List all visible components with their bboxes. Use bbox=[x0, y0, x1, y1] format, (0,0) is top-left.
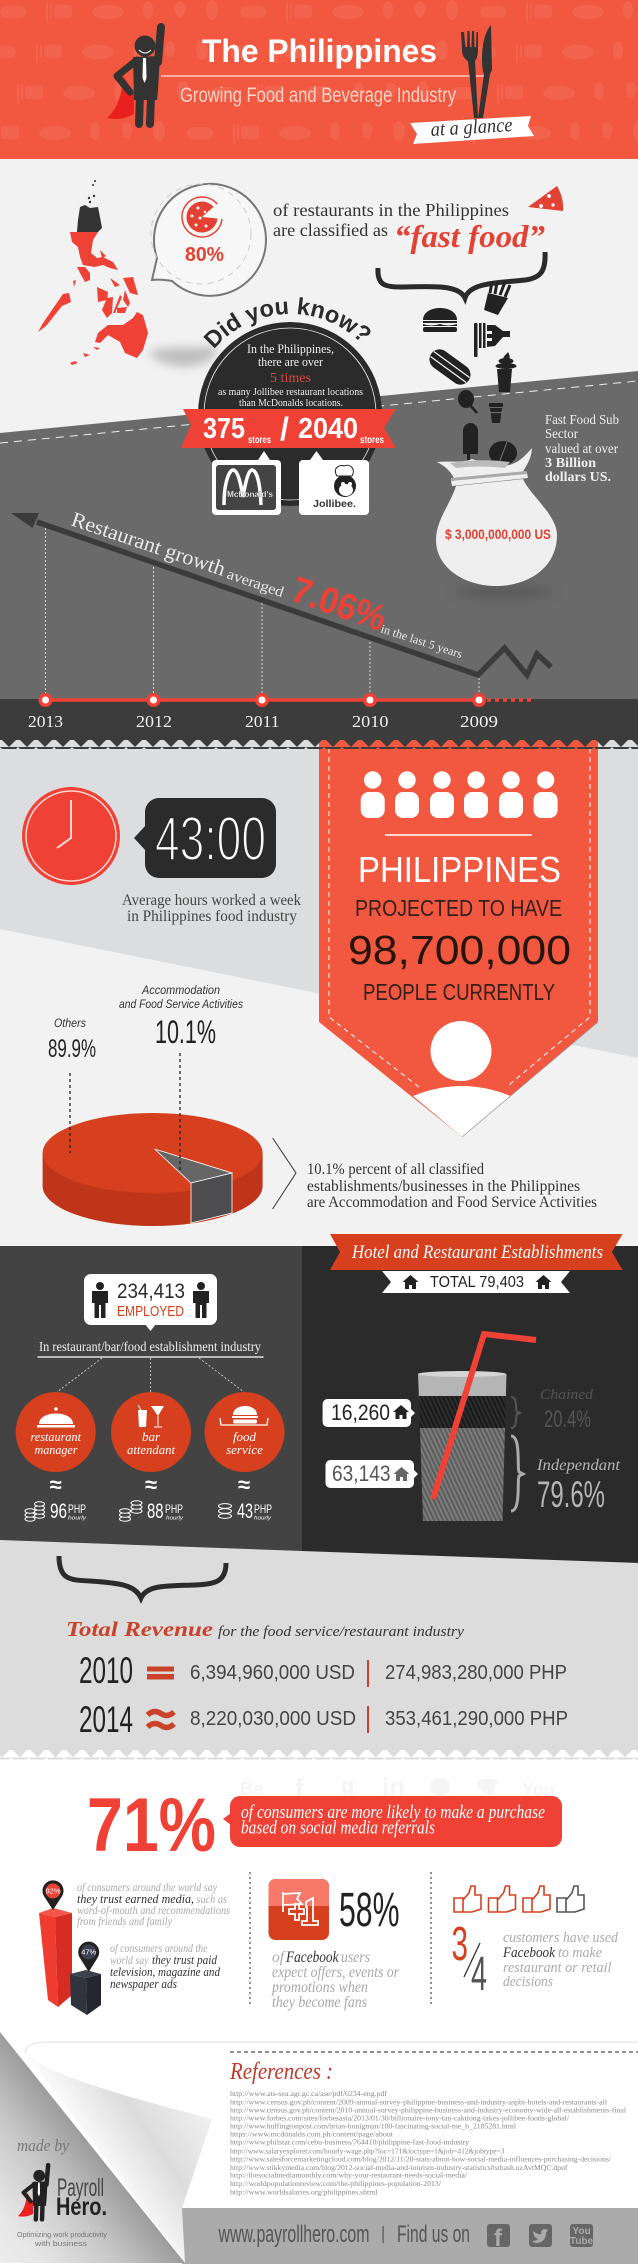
text: website: Find us on bbox=[397, 2221, 470, 2248]
icon: facebook: f bbox=[494, 2225, 503, 2252]
tagline: Optimizing work productivity bbox=[17, 2230, 107, 2239]
text: facebook offers: promotions when bbox=[271, 1979, 368, 1996]
icon: fork bbox=[474, 323, 510, 357]
text: fast food sub sector bbox=[545, 412, 619, 484]
labels: chained bbox=[540, 1387, 594, 1433]
icon: ice cream bbox=[496, 352, 516, 392]
timeline band bbox=[0, 693, 638, 740]
panel: employment bbox=[0, 1246, 302, 1551]
list: reference urls: http://www.philstar.com/cebu-business/764410/philippine-fast-food-industry bbox=[230, 2138, 469, 2147]
list: reference urls bbox=[230, 2089, 626, 2196]
text: earned media bbox=[77, 1882, 230, 1928]
icons: faint social row bbox=[240, 1772, 555, 1803]
list: reference urls: http://www.census.gov.ph/content/2009-annual-survey-philippine-business-and-industry-aspbi-hotels-and-restaurants-all bbox=[230, 2097, 607, 2106]
row: 2014 bbox=[79, 1699, 568, 1740]
list: reference urls: http://www.huffingtonpost.com/brian-honigman/100-fascinating-social-me_b_2185281.html bbox=[230, 2122, 516, 2130]
text: restaurant growth label: averaged bbox=[225, 567, 286, 601]
text: employment subhead: In restaurant/bar/food establishment industry bbox=[39, 1340, 261, 1355]
chart: earned vs paid media bars bbox=[39, 1880, 101, 2015]
text: paid media: world say bbox=[110, 1955, 149, 1967]
role: restaurant manager: ≈ bbox=[50, 1472, 62, 1497]
title: The Philippines bbox=[202, 33, 437, 69]
role: bar attendant: PHP bbox=[165, 1502, 183, 1516]
labels: independent bbox=[536, 1457, 621, 1515]
digital display: 43:00: 43:00 bbox=[155, 805, 266, 874]
text: facebook offers: expect offers, events or bbox=[272, 1964, 400, 1981]
credit: made by Payroll Hero: made by bbox=[17, 2136, 69, 2155]
text: average hours: in Philippines food industry bbox=[127, 908, 297, 925]
text: facebook offers: of bbox=[272, 1949, 287, 1966]
list: reference urls: https://www.mcdonalds.com.ph/content/page/about bbox=[230, 2130, 394, 2139]
text: fast food sub sector: valued at over bbox=[545, 441, 618, 456]
icon: fries bbox=[484, 282, 510, 315]
ribbon: store counts bbox=[181, 409, 396, 448]
list: reference urls: http://www.worldsalaries.org/philippines.shtml bbox=[230, 2187, 378, 2196]
icons: falling food bbox=[423, 282, 517, 465]
list: reference urls: http://www.forbes.com/sites/forbesasia/2013/01/30/billionaire-tony-tan-caktiong-takes-jollibee-foods-global/ bbox=[230, 2114, 570, 2122]
icons: faint social row: You bbox=[522, 1780, 555, 1800]
list: reference urls: http://thesocialmediamonthly.com/why-your-restaurant-needs-social-media/ bbox=[230, 2171, 468, 2180]
panel: revenue background bbox=[0, 1540, 638, 1750]
role: bar attendant: hourly bbox=[166, 1516, 184, 1522]
panel: hotel and restaurant establishments bbox=[302, 1234, 638, 1563]
text: earned media: of consumers around the world say bbox=[77, 1882, 218, 1894]
text: customers facebook: decisions bbox=[503, 1974, 553, 1990]
role: bar attendant bbox=[111, 1392, 191, 1523]
label: bag amount: $ 3,000,000,000 US bbox=[445, 526, 551, 542]
ribbon: hotel heading: Hotel and Restaurant Establishments bbox=[351, 1242, 603, 1263]
text: fast food sub sector: dollars US. bbox=[545, 469, 611, 484]
icon: youtube: You bbox=[572, 2226, 591, 2237]
panel: work and population background bbox=[0, 740, 638, 1246]
icon: pizza slice bbox=[528, 186, 563, 211]
text: customers facebook bbox=[502, 1930, 618, 1990]
role: bar attendant: attendant bbox=[127, 1442, 175, 1457]
icon: person head bbox=[430, 1021, 492, 1081]
role: bar attendant: ≈ bbox=[145, 1472, 157, 1497]
icon: youtube bbox=[570, 2224, 594, 2247]
text: restaurants classified bbox=[273, 200, 545, 254]
icon: pizza bbox=[182, 197, 222, 237]
footer outline bbox=[25, 2042, 638, 2053]
text: facebook offers: Facebook bbox=[285, 1949, 339, 1966]
text: pie explanation bbox=[307, 1161, 597, 1211]
role: food service: food bbox=[233, 1429, 257, 1444]
text: pie explanation: 10.1% percent of all classified bbox=[307, 1161, 484, 1178]
ribbon: store counts: 2040 bbox=[298, 413, 358, 445]
heading: total revenue: Total Revenue bbox=[66, 1617, 213, 1641]
text: earned media: word-of-mouth and recommendations bbox=[77, 1905, 230, 1917]
list: reference urls: http://www.census.gov.ph/content/2010-annual-survey-philippine-business-and-industry-economy-wide-all-establishments-final bbox=[230, 2105, 626, 2114]
role: food service: service bbox=[226, 1442, 263, 1457]
role: food service: 43 bbox=[237, 1500, 253, 1523]
heading: total revenue: for the food service/restaurant industry bbox=[218, 1624, 465, 1640]
icon: coins bbox=[120, 1501, 142, 1521]
icon: fork and knife bbox=[461, 25, 492, 118]
ribbon: at a glance: at a glance bbox=[430, 114, 513, 141]
ribbon: hotel heading bbox=[330, 1234, 622, 1270]
panel: header bbox=[0, 0, 638, 159]
callout: 71% text: of consumers are more likely to make a purchase bbox=[241, 1803, 545, 1823]
references bbox=[229, 2052, 638, 2196]
arrow: chevron bbox=[273, 1138, 296, 1209]
role: restaurant manager: restaurant bbox=[30, 1429, 81, 1444]
ribbon: store counts: stores bbox=[248, 435, 271, 446]
callout: chained count bbox=[323, 1399, 415, 1427]
text: population: PEOPLE CURRENTLY bbox=[363, 979, 555, 1005]
callout: employed: EMPLOYED bbox=[117, 1303, 184, 1320]
panel: dark gray slanted background bbox=[0, 371, 638, 699]
heading: references: References : bbox=[229, 2059, 333, 2085]
role: food service: PHP bbox=[254, 1502, 272, 1516]
brace: revenue bbox=[59, 1556, 226, 1598]
list: reference urls: http://www.stikkymedia.com/blog/2012-social-media-and-tourism-industry-statistics#sthash.uzAvtMQC.dpuf bbox=[230, 2163, 568, 2172]
role: restaurant manager bbox=[16, 1392, 96, 1523]
text: did you know body: than McDonalds locations. bbox=[239, 398, 343, 409]
brace: independent bbox=[511, 1436, 523, 1511]
chart: pie bbox=[43, 983, 263, 1226]
logo: McDonald's: McDonald's bbox=[227, 490, 274, 499]
icon: coins bbox=[218, 1504, 232, 1518]
role: food service: hourly bbox=[254, 1516, 272, 1522]
icon: burger bbox=[423, 308, 457, 332]
heading: did you know: Did you know? bbox=[203, 297, 370, 348]
tagline: with business bbox=[34, 2239, 87, 2248]
icon: popsicle bbox=[463, 423, 478, 461]
text: fast food sub sector: 3 Billion bbox=[545, 455, 597, 470]
chart: glass bbox=[418, 1334, 536, 1521]
text: did you know body: as many Jollibee restaurant locations bbox=[218, 387, 363, 398]
credit: made by Payroll Hero bbox=[17, 2136, 107, 2248]
text: facebook offers: they become fans bbox=[272, 1994, 367, 2011]
text: facebook offers: users bbox=[341, 1949, 370, 1966]
ribbon: store counts: stores bbox=[360, 435, 384, 446]
speech bubble: 80% bbox=[151, 184, 266, 296]
icon: persons bbox=[92, 1282, 209, 1318]
list: reference urls: http://worldpopulationreview.com/the-philippines-population-2013/ bbox=[230, 2179, 442, 2188]
map: Philippines bbox=[38, 180, 216, 366]
labels: pie: and Food Service Activities bbox=[119, 997, 243, 1011]
text: population: 98,700,000 bbox=[348, 927, 571, 973]
labels: years: 2011 bbox=[245, 712, 280, 731]
labels: pie bbox=[48, 983, 243, 1063]
callout: employed: 234,413 bbox=[117, 1280, 185, 1303]
panel: footer bar bbox=[182, 2208, 638, 2264]
logo text: Hero. bbox=[56, 2193, 107, 2221]
pin: 92%: 92% bbox=[45, 1886, 61, 1896]
text: population: PHILIPPINES bbox=[358, 849, 561, 890]
callout: 71% text: based on social media referrals bbox=[241, 1818, 435, 1838]
role: food service bbox=[204, 1392, 284, 1523]
labels: pie: 10.1% bbox=[155, 1014, 216, 1050]
text: fast food sub sector: Sector bbox=[545, 426, 578, 441]
icon: twitter bbox=[529, 2224, 552, 2247]
text: pie explanation: are Accommodation and Food Service Activities bbox=[307, 1194, 597, 1211]
callout: independent count: 63,143 bbox=[332, 1461, 390, 1486]
text: did you know body: 5 times bbox=[270, 371, 311, 386]
logo: Jollibee bbox=[299, 451, 369, 515]
role: food service: ≈ bbox=[238, 1472, 250, 1497]
role: restaurant manager: manager bbox=[34, 1442, 78, 1457]
text: restaurants classified: of restaurants in the Philippines bbox=[273, 200, 509, 220]
labels: years: 2009 bbox=[460, 712, 498, 731]
panel: social media bbox=[0, 1750, 638, 2265]
text: restaurant growth label bbox=[68, 507, 465, 661]
ribbon: total bbox=[382, 1271, 570, 1293]
text: paid media: they trust paid bbox=[152, 1952, 217, 1967]
text: earned media: they trust earned media, bbox=[77, 1891, 194, 1906]
labels: chained: Chained bbox=[540, 1387, 594, 1403]
logo text bbox=[56, 2174, 107, 2221]
stat: 71%: 71% bbox=[87, 1783, 216, 1868]
stat: 80%: 80% bbox=[185, 244, 224, 266]
panel: total revenue bbox=[66, 1617, 568, 1740]
row: 2014: 8,220,030,000 USD bbox=[190, 1707, 356, 1730]
labels: years bbox=[28, 712, 498, 731]
text: average hours bbox=[122, 892, 301, 925]
labels: pie: Accommodation bbox=[141, 983, 220, 997]
heading: total revenue bbox=[66, 1617, 465, 1641]
text: fast food sub sector: Fast Food Sub bbox=[545, 412, 619, 427]
stat: 7.06%: 7.06% bbox=[286, 569, 391, 639]
role: bar attendant: bar bbox=[142, 1429, 161, 1444]
row: 2010: 2010 bbox=[79, 1650, 133, 1691]
list: reference urls: http://www.salaryexplorer.com/hourly-wage.php?loc=171&loctype=1&job=412&jobtype=3 bbox=[230, 2146, 505, 2155]
stat: three quarters: 4 bbox=[471, 1948, 487, 2001]
row: 2010: 274,983,280,000 PHP bbox=[385, 1661, 567, 1684]
row: 2014: 353,461,290,000 PHP bbox=[385, 1707, 568, 1730]
icon: hot dog bbox=[426, 345, 474, 389]
icons: faint social row: f bbox=[295, 1773, 304, 1803]
text: paid media: newspaper ads bbox=[110, 1976, 177, 1991]
text: did you know body: In the Philippines, bbox=[247, 341, 334, 356]
text: customers facebook: customers have used bbox=[503, 1930, 618, 1946]
role: bar attendant: 88 bbox=[147, 1500, 164, 1523]
text: facebook offers bbox=[271, 1949, 400, 2011]
stat: three quarters: 3 bbox=[452, 1918, 468, 1971]
labels: years: 2010 bbox=[352, 712, 388, 731]
icon: plus one flag bbox=[268, 1879, 329, 1940]
money bag bbox=[436, 448, 557, 599]
callout: independent count bbox=[326, 1460, 418, 1488]
text: restaurant growth label: in the last 5 years bbox=[379, 622, 465, 661]
text: customers facebook: Facebook bbox=[502, 1945, 555, 1961]
text: paid media bbox=[110, 1943, 220, 1991]
ribbon: total: TOTAL 79,403 bbox=[430, 1274, 524, 1291]
text: restaurants classified: “fast food” bbox=[394, 218, 545, 254]
text: population: PROJECTED TO HAVE bbox=[355, 895, 562, 921]
digital display: 43:00 bbox=[134, 798, 276, 878]
role: restaurant manager: PHP bbox=[68, 1502, 86, 1516]
icons: faint social row: in bbox=[382, 1772, 405, 1802]
text: population bbox=[348, 849, 571, 1005]
logo: superhero bbox=[18, 2165, 48, 2219]
tagline bbox=[17, 2230, 107, 2248]
zigzag edge bbox=[0, 740, 638, 749]
icon: coffee cup bbox=[489, 403, 503, 423]
text: restaurant growth label: Restaurant growth bbox=[68, 507, 229, 581]
chart: restaurant growth arrow bbox=[11, 507, 551, 699]
brace: chained bbox=[511, 1397, 521, 1428]
icon: clock bbox=[22, 787, 120, 885]
icon: facebook bbox=[487, 2224, 510, 2252]
list: reference urls: http://www.salesforcemarketingcloud.com/blog/2012/11/20-stats-about-how-social-media-influences-purchasing-decisions/ bbox=[230, 2155, 612, 2164]
text: average hours: Average hours worked a week bbox=[122, 892, 301, 909]
callout: 71% text bbox=[223, 1796, 562, 1847]
row: 2010: 6,394,960,000 USD bbox=[190, 1661, 355, 1684]
text: did you know body bbox=[218, 341, 363, 409]
ribbon: at a glance bbox=[410, 114, 534, 144]
text: earned media: from friends and family bbox=[77, 1916, 173, 1928]
ribbon: store counts: 375 bbox=[203, 413, 245, 445]
text: website: www.payrollhero.com bbox=[218, 2221, 370, 2248]
subtitle: Growing Food and Beverage Industry bbox=[180, 83, 456, 107]
row: 2010 bbox=[79, 1650, 567, 1691]
labels: years: 2013 bbox=[28, 712, 63, 731]
labels: pie: Others bbox=[54, 1016, 86, 1030]
callout: employed bbox=[84, 1274, 217, 1331]
text: restaurants classified: are classified as bbox=[273, 220, 388, 240]
brace: fast food bbox=[378, 252, 545, 298]
labels: chained: 20.4% bbox=[544, 1406, 591, 1433]
icons: people row bbox=[361, 771, 558, 818]
callout: chained count: 16,260 bbox=[331, 1400, 390, 1425]
text: customers facebook: to make bbox=[558, 1945, 602, 1961]
stat: 58%: 58% bbox=[339, 1884, 400, 1937]
icons: faint social row: Be bbox=[240, 1779, 263, 1799]
icon: youtube: Tube bbox=[570, 2236, 594, 2247]
stat: three quarters bbox=[452, 1918, 487, 2001]
text: paid media: of consumers around the bbox=[110, 1943, 208, 1955]
text: did you know body: there are over bbox=[258, 354, 324, 369]
page curl bbox=[0, 2032, 212, 2263]
icons: thumbs up bbox=[454, 1886, 584, 1912]
role: restaurant manager: hourly bbox=[68, 1516, 87, 1522]
text: pie explanation: establishments/businesses in the Philippines bbox=[307, 1178, 580, 1195]
role: restaurant manager: 96 bbox=[50, 1500, 67, 1523]
logo: Jollibee: Jollibee. bbox=[313, 498, 356, 510]
ribbon: store counts: / bbox=[280, 411, 289, 447]
row: 2014: 2014 bbox=[79, 1699, 133, 1740]
labels: independent: Independant bbox=[536, 1457, 621, 1474]
pin: 47%: 47% bbox=[81, 1948, 97, 1956]
logo: McDonald's bbox=[212, 451, 281, 515]
icons: faint social row: g bbox=[341, 1773, 354, 1798]
labels: pie: 89.9% bbox=[48, 1035, 96, 1063]
icon: superhero bbox=[107, 27, 161, 124]
icon: chicken leg bbox=[458, 390, 477, 413]
icon: coins bbox=[25, 1502, 44, 1521]
list: reference urls: http://www.ats-sea.agr.gc.ca/ase/pdf/6234-eng.pdf bbox=[230, 2089, 388, 2098]
text: earned media: such as bbox=[196, 1894, 227, 1906]
decorative dashed line bbox=[0, 381, 638, 443]
banner: population bbox=[319, 740, 598, 1137]
logo text: Payroll bbox=[57, 2174, 104, 2202]
text: customers facebook: restaurant or retail bbox=[503, 1960, 612, 1976]
labels: years: 2012 bbox=[136, 712, 172, 731]
icon: burger in bag bbox=[489, 441, 517, 465]
text: paid media: television, magazine and bbox=[110, 1964, 220, 1979]
did you know circle bbox=[181, 297, 396, 515]
